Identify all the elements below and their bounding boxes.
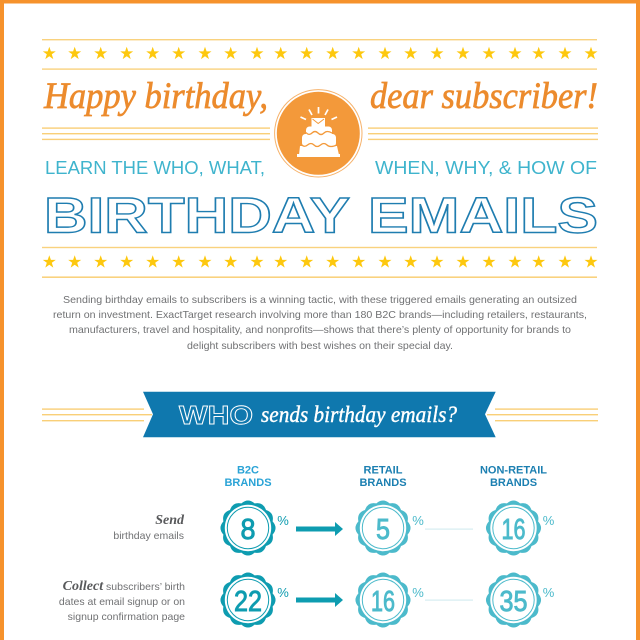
intro paragraph: return on investment. ExactTarget research involving more than 180 B2C brands—including retailers, restaurants, <box>53 309 587 321</box>
row label: send: Send <box>155 513 185 528</box>
intro paragraph <box>53 294 587 352</box>
row label: send: birthday emails <box>113 530 184 542</box>
badge: non-retail send 16%: % <box>543 513 555 528</box>
arrow: B2C to retail, collect <box>296 593 343 607</box>
banner heading: script: sends birthday emails? <box>261 402 457 427</box>
badge: B2C send 8%: % <box>277 513 289 528</box>
cake tiers <box>297 126 340 157</box>
badge: retail send 5% <box>355 500 424 556</box>
badge: retail send 5%: % <box>412 513 424 528</box>
badge: B2C collect 22%: 22 <box>234 586 262 618</box>
connector line: collect <box>425 600 473 601</box>
column header: B2C: B2C <box>237 464 259 476</box>
badge: non-retail collect 35%: % <box>543 585 555 600</box>
row label: collect: signup confirmation page <box>68 611 185 623</box>
envelope <box>312 118 325 128</box>
subtitle left: LEARN THE WHO, WHAT, <box>45 158 265 178</box>
triple rule by banner right <box>487 408 598 421</box>
badge: B2C send 8% <box>220 500 289 556</box>
badge: retail send 5%: 5 <box>376 514 390 546</box>
column header: B2C: BRANDS <box>224 477 272 489</box>
headline: EMAILS: EMAILS <box>368 188 598 244</box>
triple rule left <box>42 127 270 140</box>
section banner <box>143 392 496 437</box>
title script right: dear subscriber! <box>370 76 598 117</box>
badge: retail collect 16%: 16 <box>371 586 395 618</box>
badge: retail collect 16% <box>355 572 424 628</box>
column header: retail <box>359 464 407 489</box>
top star band <box>42 39 598 70</box>
badge: B2C collect 22% <box>220 572 289 628</box>
title script left: Happy birthday, <box>43 76 268 117</box>
sparkle rays <box>300 107 337 120</box>
column header: retail: RETAIL <box>364 464 403 476</box>
lower star band <box>42 247 598 278</box>
triple rule by banner left <box>42 408 152 421</box>
banner heading: WHO: WHO <box>179 400 253 430</box>
column header: non-retail: BRANDS <box>490 477 537 489</box>
column header: non-retail <box>480 464 547 489</box>
icon: birthday cake medallion <box>275 90 362 177</box>
badge: B2C collect 22%: % <box>277 585 289 600</box>
badge: non-retail send 16% <box>486 500 555 556</box>
arrow: B2C to retail, send <box>296 522 343 536</box>
intro paragraph: Sending birthday emails to subscribers is a winning tactic, with these triggered emails generating an outsized <box>63 294 577 306</box>
column header: non-retail: NON-RETAIL <box>480 464 547 476</box>
intro paragraph: delight subscribers with best wishes on their special day. <box>187 340 453 352</box>
badge: retail collect 16%: % <box>412 585 424 600</box>
headline: BIRTHDAY: BIRTHDAY <box>44 188 350 244</box>
badge: non-retail collect 35% <box>486 572 555 628</box>
intro paragraph: manufacturers, travel and hospitality, and nonprofits—shows that there’s plenty of opportunity for brands to <box>69 324 571 336</box>
row label: collect <box>59 579 185 623</box>
column header: retail: BRANDS <box>359 477 407 489</box>
badge: B2C send 8%: 8 <box>240 514 256 546</box>
badge: non-retail send 16%: 16 <box>502 514 526 546</box>
triple rule right <box>368 127 598 140</box>
row label: collect: Collect subscribers’ birth <box>63 579 185 594</box>
column header: B2C <box>224 464 272 489</box>
row label: collect: dates at email signup or on <box>59 596 185 608</box>
subtitle right: WHEN, WHY, & HOW OF <box>375 158 597 178</box>
connector line: send <box>425 528 473 530</box>
badge: non-retail collect 35%: 35 <box>500 586 528 618</box>
row label: send <box>113 513 185 542</box>
